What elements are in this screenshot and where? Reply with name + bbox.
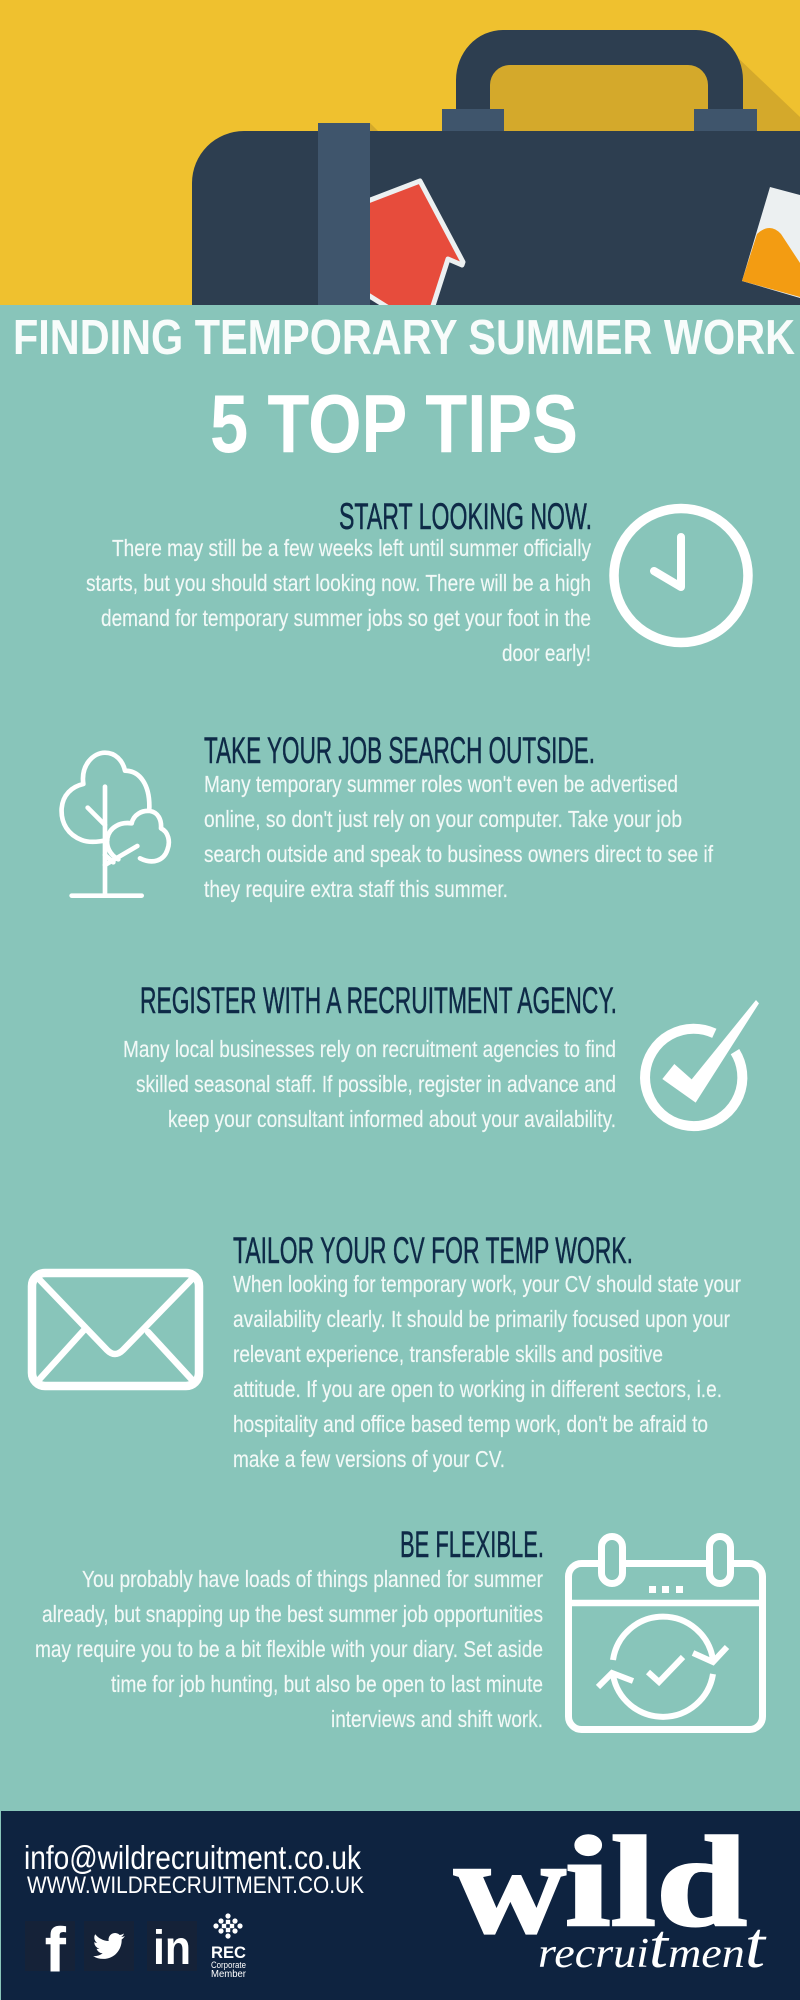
- tip 3 body: skilled seasonal staff. If possible, register in advance and: [136, 1071, 616, 1097]
- REC corporate member badge: Member: [211, 1969, 247, 1980]
- tip 1 body: There may still be a few weeks left until summer officially: [112, 535, 591, 561]
- website: WWW.WILDRECRUITMENT.CO.UK: [27, 1872, 364, 1899]
- footer: [1, 1810, 800, 2000]
- icon: twitter: [84, 1921, 134, 1971]
- wild recruitment logo: ild: [565, 1810, 747, 1953]
- tip 1 body: [86, 535, 591, 666]
- suitcase body: [192, 131, 800, 306]
- tip 2 body: [204, 771, 713, 902]
- tip 2 body: online, so don't just rely on your computer. Take your job: [204, 806, 682, 832]
- tip 4: tailor your cv: [233, 1230, 741, 1472]
- banner: suitcase illustration: [0, 0, 800, 312]
- icon: tree: [62, 753, 169, 896]
- tip 3 body: Many local businesses rely on recruitment agencies to find: [123, 1036, 616, 1062]
- icon: clock: [614, 508, 748, 642]
- tip 4 body: relevant experience, transferable skills and positive: [233, 1341, 663, 1367]
- tip 3 body: keep your consultant informed about your availability.: [168, 1106, 616, 1132]
- tip 5 body: already, but snapping up the best summer job opportunities: [42, 1601, 543, 1627]
- tip 2: take your job search outside: [204, 730, 713, 902]
- red arrow sticker: [360, 181, 463, 312]
- tip 5 body: may require you to be a bit flexible with your diary. Set aside: [35, 1636, 543, 1662]
- white and orange sticker: [742, 187, 800, 298]
- luggage strap: [318, 123, 370, 306]
- tip 1 body: demand for temporary summer jobs so get your foot in the: [101, 605, 591, 631]
- tip 1 body: starts, but you should start looking now. There will be a high: [86, 570, 591, 596]
- tip 5 body: [35, 1566, 543, 1732]
- REC corporate member badge: Corporate: [211, 1960, 246, 1970]
- tip 5 body: time for job hunting, but also be open to last minute: [111, 1671, 543, 1697]
- tip 1 heading: START LOOKING NOW.: [339, 496, 592, 537]
- tip 5 heading: BE FLEXIBLE.: [400, 1524, 544, 1565]
- icon: facebook: [25, 1916, 75, 1985]
- icon: check mark in circle: [645, 1000, 759, 1126]
- REC corporate member badge: REC: [211, 1943, 246, 1962]
- wild recruitment logo: w: [454, 1813, 566, 1962]
- tip 1 body: door early!: [502, 640, 591, 666]
- tip 5 body: You probably have loads of things planned for summer: [82, 1566, 543, 1592]
- tip 2 body: Many temporary summer roles won't even be advertised: [204, 771, 678, 797]
- subtitle: 5 TOP TIPS: [210, 377, 578, 470]
- tip 4 body: make a few versions of your CV.: [233, 1446, 505, 1472]
- contact email: info@wildrecruitment.co.uk: [24, 1839, 361, 1876]
- tip 5 body: interviews and shift work.: [331, 1706, 543, 1732]
- tip 5: be flexible: [35, 1524, 544, 1732]
- tip 3 body: [123, 1036, 616, 1132]
- icon: linkedin: in: [153, 1922, 191, 1975]
- tip 1: start looking now: [86, 496, 592, 666]
- icon: facebook: f: [45, 1916, 66, 1985]
- wild recruitment logo: [454, 1810, 767, 1982]
- icon: calendar: [566, 1536, 765, 1730]
- wild recruitment logo: recruitment: [538, 1909, 767, 1982]
- REC corporate member badge: [211, 1913, 247, 1980]
- tip 3: register with a recruitment agency: [123, 980, 617, 1132]
- tip 4 body: hospitality and office based temp work, don't be afraid to: [233, 1411, 708, 1437]
- teal band under the banner: [0, 305, 800, 318]
- tip 2 body: they require extra staff this summer.: [204, 876, 508, 902]
- icon: envelope: [32, 1273, 199, 1386]
- tip 4 body: [233, 1271, 741, 1472]
- suitcase handle: [456, 30, 743, 131]
- handle brackets: [442, 109, 757, 132]
